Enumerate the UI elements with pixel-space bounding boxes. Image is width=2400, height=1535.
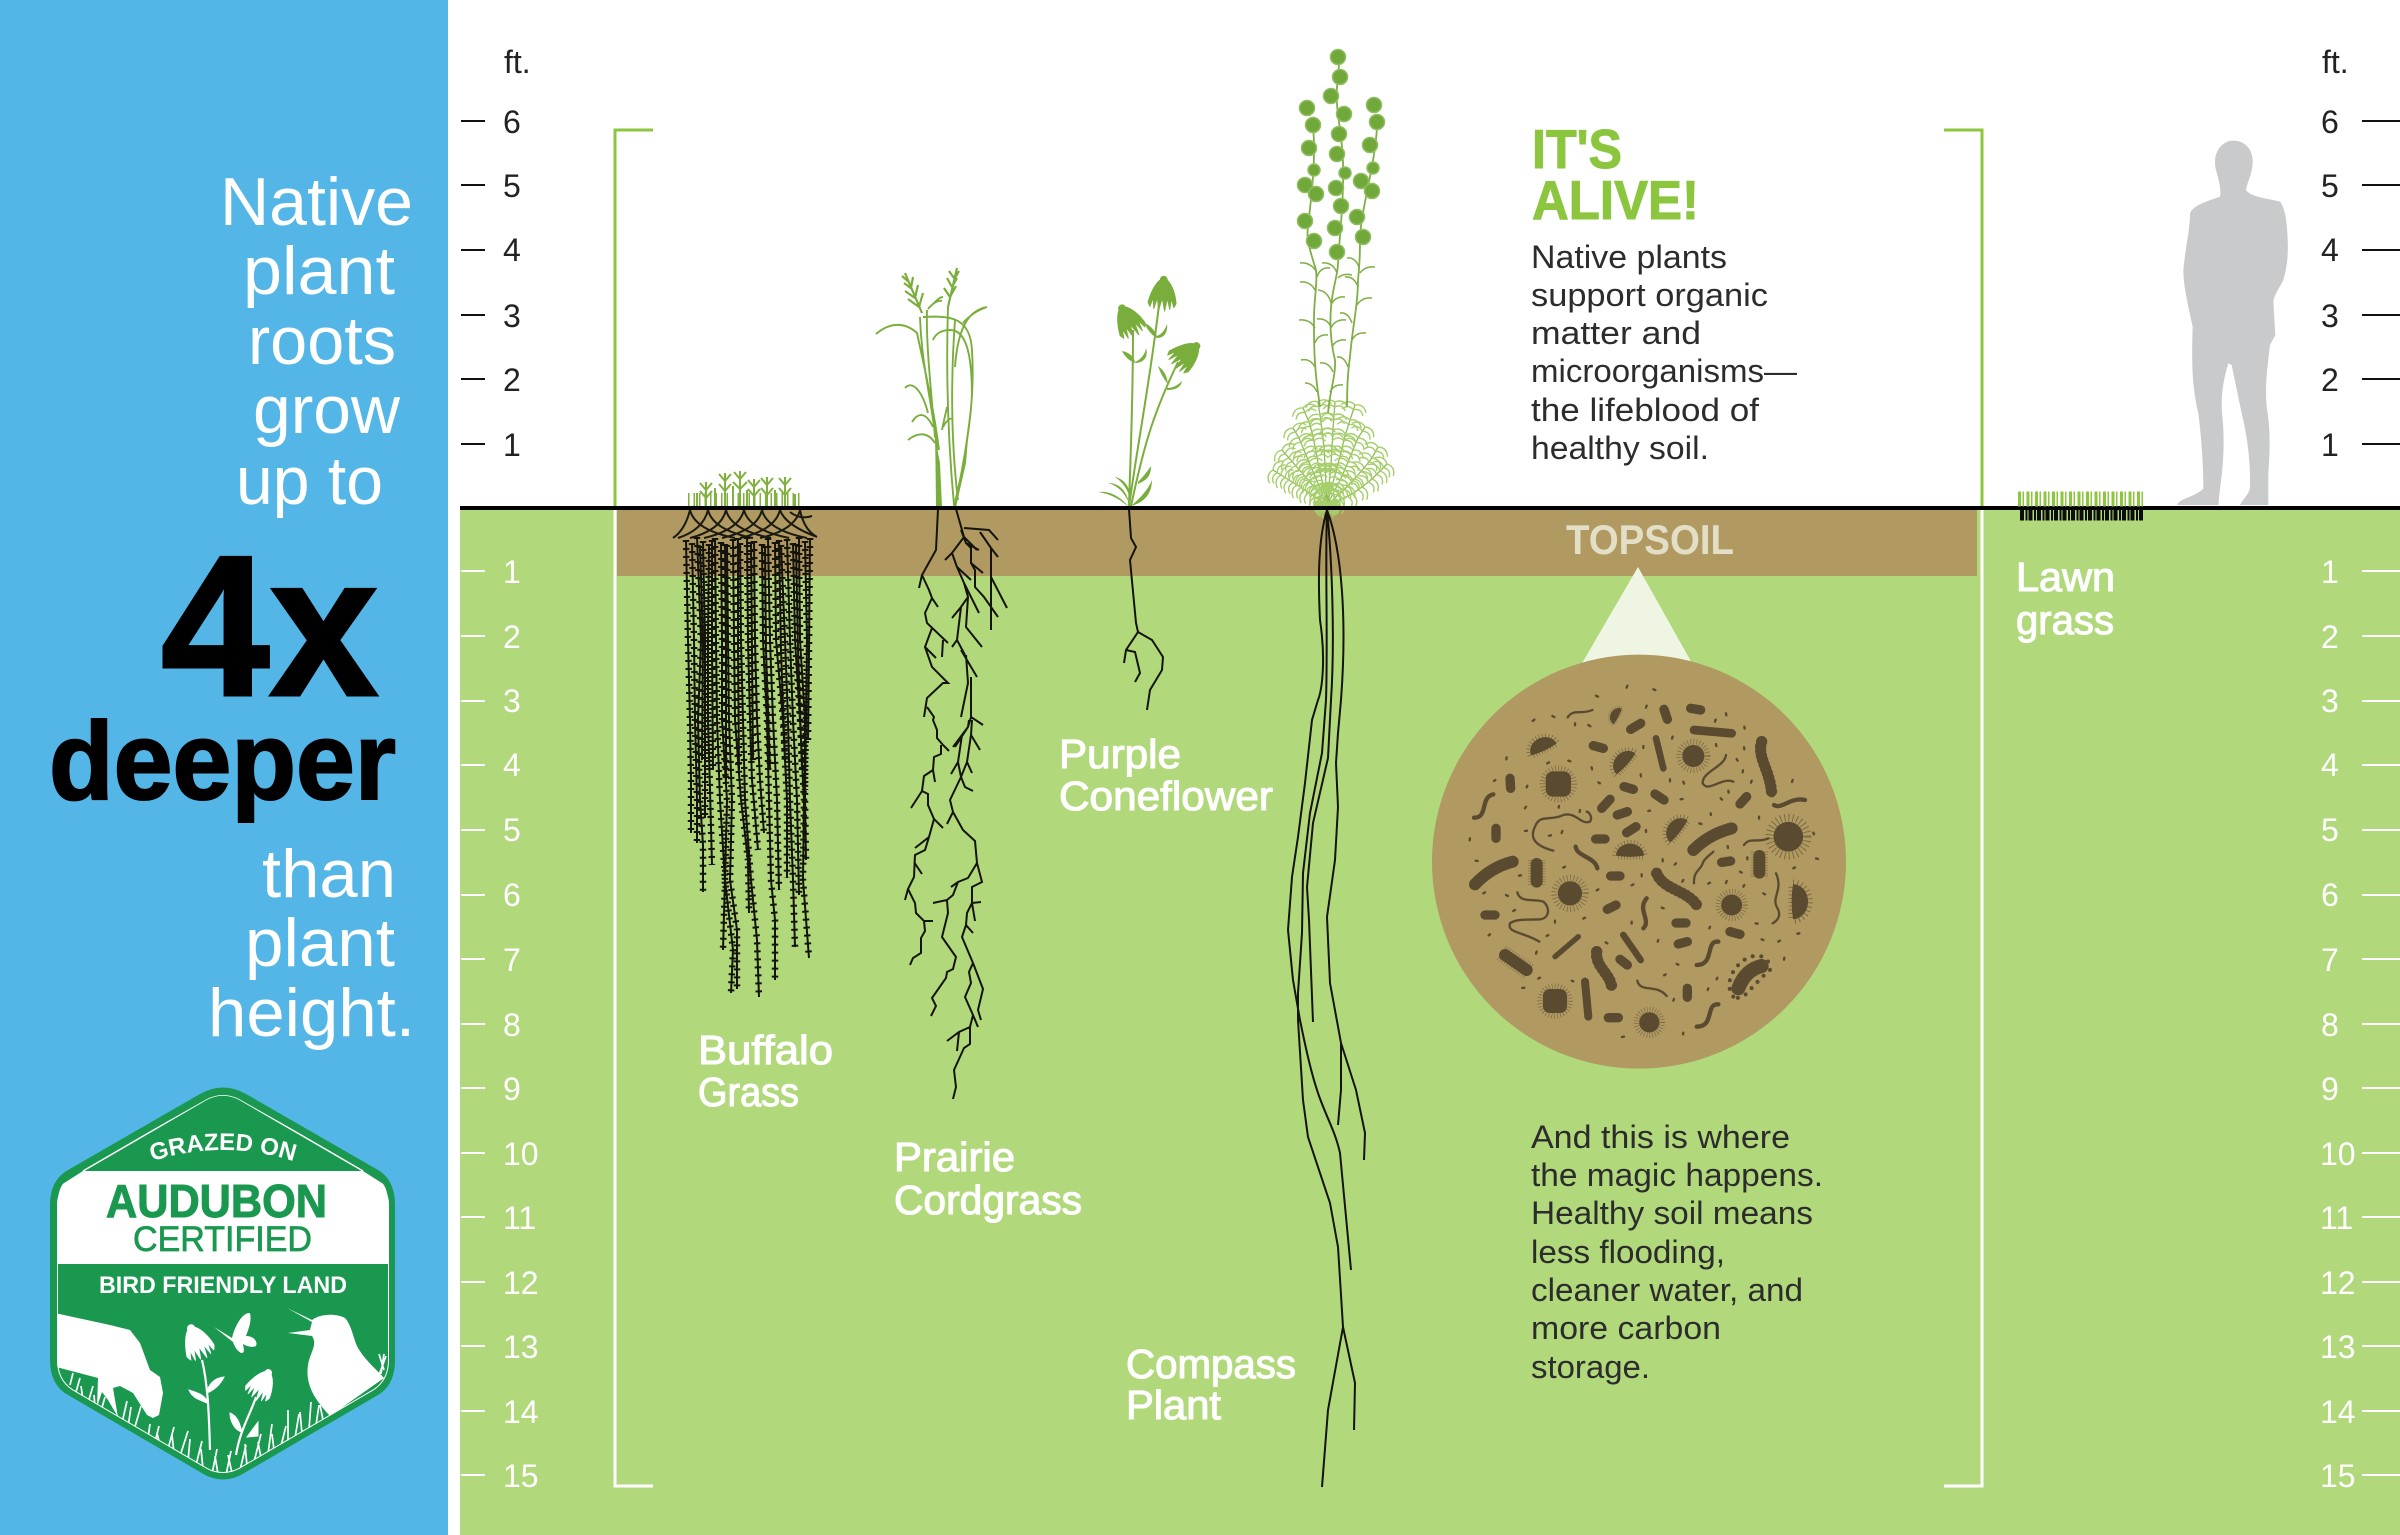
below-ground scale bbox=[461, 554, 539, 1494]
below-ground scale: 13 bbox=[503, 1329, 539, 1365]
below-ground scale: 2 bbox=[503, 619, 521, 655]
label: Compass Plant bbox=[1126, 1341, 1296, 1428]
coneflowers and stems bbox=[185, 1324, 273, 1438]
below-ground scale: 8 bbox=[503, 1007, 521, 1043]
below-ground scale: 10 bbox=[503, 1136, 539, 1172]
label: Prairie Cordgrass bbox=[894, 1134, 1082, 1223]
unit label: ft. bbox=[504, 44, 531, 80]
label: Buffalo Grass bbox=[698, 1027, 833, 1115]
grass along the bottom edge bbox=[70, 1354, 386, 1475]
round spiked microbes bbox=[1540, 742, 1807, 1035]
text block: where the magic happens: more carbon bbox=[1531, 1310, 1721, 1346]
text block: where the magic happens: the magic happens. bbox=[1531, 1157, 1823, 1193]
above-ground scale: 1 bbox=[2321, 427, 2339, 463]
below-ground scale: 3 bbox=[503, 683, 521, 719]
below-ground scale: 7 bbox=[503, 942, 521, 978]
spiky elongated bacteria bbox=[1502, 852, 1759, 972]
headline: native plant roots grow up to bbox=[220, 164, 413, 519]
text block: where the magic happens: cleaner water, and bbox=[1531, 1272, 1803, 1308]
below-ground scale: 11 bbox=[2320, 1200, 2353, 1236]
label: Lawn grass: Lawn bbox=[2016, 554, 2115, 600]
below-ground scale: 15 bbox=[2320, 1458, 2356, 1494]
below-ground scale: 14 bbox=[2320, 1394, 2356, 1430]
above-ground scale: 6 bbox=[2321, 104, 2339, 140]
compass plant basal fern foliage bbox=[1273, 402, 1387, 505]
coneflower heads bbox=[1108, 276, 1208, 377]
below-ground scale bbox=[2320, 554, 2400, 1494]
buffalo grass shoots bbox=[688, 471, 802, 506]
compass plant flower clusters bbox=[1298, 50, 1384, 260]
below-ground scale: 6 bbox=[503, 877, 521, 913]
rod bacteria bbox=[1475, 708, 1747, 1018]
text block: where the magic happens bbox=[1531, 1119, 1823, 1385]
heading: It's alive: IT'S bbox=[1532, 118, 1622, 180]
panel: blue headline sidebar bbox=[0, 0, 448, 1535]
bird silhouette bbox=[287, 1308, 384, 1416]
buffalo grass roots bbox=[686, 537, 810, 997]
plant: lawn grass with shallow roots bbox=[2018, 499, 2143, 515]
headline: native plant roots grow up to: grow bbox=[253, 372, 401, 448]
compass plant taproots bbox=[1288, 510, 1365, 1487]
butterfly bbox=[214, 1313, 257, 1353]
below-ground scale: 10 bbox=[2320, 1136, 2356, 1172]
below-ground scale: 11 bbox=[503, 1200, 536, 1236]
label: Purple Coneflower: Purple bbox=[1059, 731, 1181, 777]
headline: native plant roots grow up to: roots bbox=[248, 303, 396, 379]
headline: than plant height: plant bbox=[245, 905, 395, 981]
cordgrass blades and seed heads bbox=[876, 268, 987, 507]
below-ground scale: 4 bbox=[503, 747, 521, 783]
headline: than plant height: height. bbox=[208, 975, 415, 1051]
magnifier cone bbox=[1581, 567, 1693, 665]
above-ground scale: 4 bbox=[503, 232, 521, 268]
compass plant stems bbox=[1307, 60, 1377, 413]
label: topsoil: TOPSOIL bbox=[1566, 516, 1734, 563]
coneflower leaves bbox=[1098, 323, 1182, 507]
soil circle bbox=[1432, 655, 1846, 1069]
above-ground scale bbox=[461, 104, 521, 463]
plant: prairie cordgrass bbox=[876, 268, 1007, 1099]
badge text bbox=[150, 1150, 296, 1162]
above-ground scale: 4 bbox=[2321, 232, 2339, 268]
ground line bbox=[460, 506, 2400, 510]
text block: native plants support bbox=[1531, 239, 1797, 466]
tiny bacteria specks bbox=[1470, 686, 1818, 1037]
coneflower root bbox=[1124, 509, 1163, 710]
coneflower stems bbox=[1129, 305, 1178, 506]
text block: native plants support: healthy soil. bbox=[1531, 430, 1709, 466]
label: Lawn grass: grass bbox=[2016, 597, 2114, 643]
plant: buffalo grass bbox=[673, 471, 817, 997]
label: Compass Plant: Plant bbox=[1126, 1382, 1222, 1428]
above-ground scale: 5 bbox=[2321, 168, 2339, 204]
headline: native plant roots grow up to: plant bbox=[243, 233, 395, 309]
above-ground scale: 6 bbox=[503, 104, 521, 140]
text block: where the magic happens: storage. bbox=[1531, 1349, 1650, 1385]
above-ground scale: 3 bbox=[503, 298, 521, 334]
big statistic: 4x deeper: deeper bbox=[49, 700, 396, 823]
below-ground scale: 1 bbox=[2321, 554, 2339, 590]
label: Lawn grass bbox=[2016, 554, 2115, 643]
beaded bacterium bbox=[1729, 956, 1770, 998]
label: Purple Coneflower bbox=[1059, 731, 1273, 819]
big statistic: 4x deeper: 4x bbox=[161, 515, 378, 738]
label: Purple Coneflower: Coneflower bbox=[1059, 773, 1273, 819]
bracket: native plants range bbox=[615, 130, 1982, 1486]
text block: native plants support: matter and bbox=[1531, 315, 1701, 351]
headline: than plant height: than bbox=[262, 836, 396, 912]
below-ground scale: 9 bbox=[503, 1071, 521, 1107]
cordgrass roots bbox=[905, 509, 1007, 1099]
big statistic: 4x deeper bbox=[49, 515, 396, 823]
panel: below ground green soil bbox=[460, 508, 2400, 1535]
below-ground scale: 12 bbox=[2320, 1265, 2356, 1301]
below-ground scale: 14 bbox=[503, 1394, 539, 1430]
plant: purple coneflower bbox=[1098, 276, 1208, 710]
plant: compass plant bbox=[1273, 50, 1387, 1487]
above-ground scale: 2 bbox=[503, 362, 521, 398]
below-ground scale: 5 bbox=[2321, 812, 2339, 848]
half moon bacteria bbox=[1526, 705, 1808, 919]
above-ground scale: 1 bbox=[503, 427, 521, 463]
heading: It's alive bbox=[1532, 118, 1699, 231]
label: Prairie Cordgrass: Prairie bbox=[894, 1134, 1015, 1180]
buffalo grass root crown bbox=[673, 510, 817, 538]
below-ground scale: 1 bbox=[503, 554, 521, 590]
below-ground scale: 13 bbox=[2320, 1329, 2356, 1365]
below-ground scale: 15 bbox=[503, 1458, 539, 1494]
badge: Audubon Certified Bird Friendly Land: AUDUBON bbox=[106, 1175, 327, 1227]
headline: native plant roots grow up to: Native bbox=[220, 164, 413, 240]
icon: human silhouette for scale bbox=[2177, 141, 2288, 505]
topsoil band bbox=[617, 508, 1977, 576]
text block: native plants support: Native plants bbox=[1531, 239, 1727, 275]
plant labels bbox=[698, 554, 2115, 1428]
label: Buffalo Grass: Buffalo bbox=[698, 1027, 833, 1073]
lawn grass roots bbox=[2020, 510, 2143, 520]
compass plant side leaves bbox=[1299, 258, 1375, 392]
badge: Audubon Certified Bird Friendly Land: CERTIFIED bbox=[133, 1220, 312, 1259]
below-ground scale: 5 bbox=[503, 812, 521, 848]
below-ground scale: 3 bbox=[2321, 683, 2339, 719]
soil microbes magnified circle bbox=[1432, 655, 1846, 1069]
below-ground scale: 8 bbox=[2321, 1007, 2339, 1043]
left height scale bbox=[461, 44, 539, 1494]
badge: Audubon Certified Bird Friendly Land: BIRD FRIENDLY LAND bbox=[99, 1272, 347, 1299]
text block: where the magic happens: Healthy soil means bbox=[1531, 1195, 1813, 1231]
above-ground scale: 2 bbox=[2321, 362, 2339, 398]
squiggle bacteria bbox=[1474, 710, 1805, 1027]
label: Compass Plant: Compass bbox=[1126, 1341, 1296, 1387]
label: Prairie Cordgrass: Cordgrass bbox=[894, 1177, 1082, 1223]
text block: where the magic happens: And this is where bbox=[1531, 1119, 1790, 1155]
below-ground scale: 6 bbox=[2321, 877, 2339, 913]
text block: native plants support: microorganisms— bbox=[1531, 353, 1797, 389]
below-ground scale: 7 bbox=[2321, 942, 2339, 978]
below-ground scale: 9 bbox=[2321, 1071, 2339, 1107]
below-ground scale: 2 bbox=[2321, 619, 2339, 655]
text block: native plants support: support organic bbox=[1531, 277, 1768, 313]
badge: Audubon Certified Bird Friendly Land: GRAZED ON bbox=[150, 1133, 297, 1161]
above-ground scale: 5 bbox=[503, 168, 521, 204]
headline: than plant height bbox=[208, 836, 415, 1051]
lawn grass blades bbox=[2018, 492, 2143, 506]
above-ground scale: 3 bbox=[2321, 298, 2339, 334]
text block: native plants support: the lifeblood of bbox=[1531, 392, 1759, 428]
heading: It's alive: ALIVE! bbox=[1532, 169, 1699, 231]
text block: where the magic happens: less flooding, bbox=[1531, 1234, 1725, 1270]
below-ground scale: 4 bbox=[2321, 747, 2339, 783]
cow silhouette bbox=[50, 1312, 163, 1418]
unit label: ft. bbox=[2322, 44, 2349, 80]
caterpillar bacteria bbox=[1597, 742, 1772, 987]
above-ground scale bbox=[2321, 104, 2400, 463]
right height scale bbox=[2320, 44, 2400, 1494]
badge: Audubon Certified Bird Friendly Land bbox=[50, 1088, 395, 1480]
below-ground scale: 12 bbox=[503, 1265, 539, 1301]
label: Buffalo Grass: Grass bbox=[698, 1069, 799, 1115]
headline: native plant roots grow up to: up to bbox=[236, 443, 383, 519]
